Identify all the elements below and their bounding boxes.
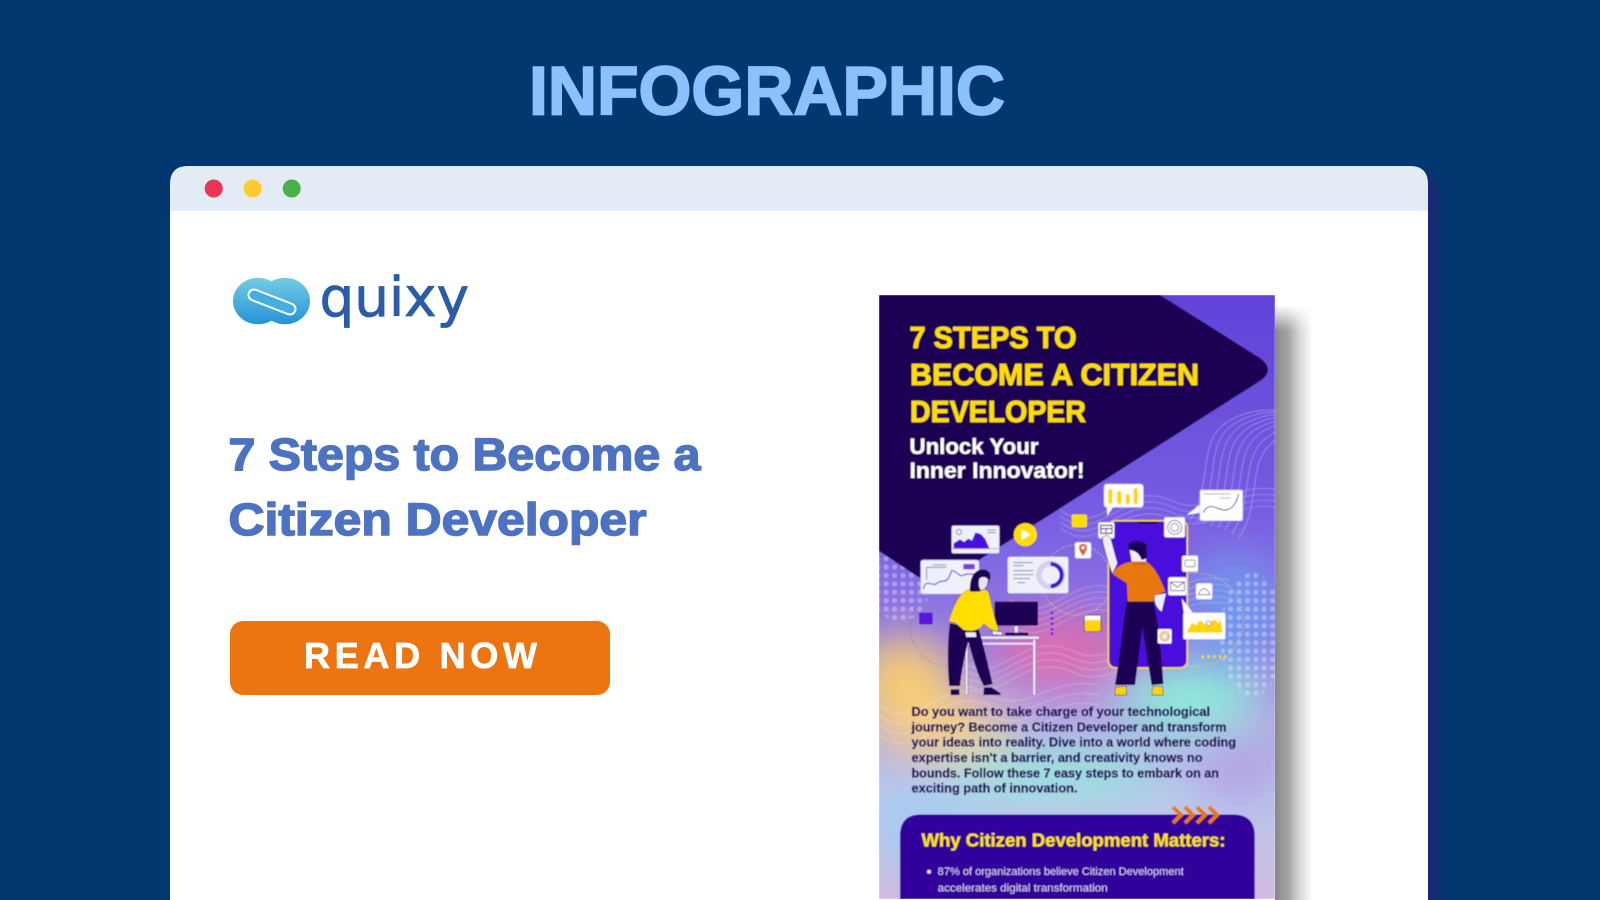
wordmark: quixy [320, 266, 469, 329]
dark arrow shape [879, 295, 1268, 588]
intro paragraph: Do you want to take charge of your technological [912, 705, 1210, 719]
panel heading: Why Citizen Development Matters: [922, 830, 1226, 850]
mail tile [1168, 577, 1187, 595]
window body [170, 211, 1428, 900]
button: read now [230, 621, 610, 695]
intro paragraph: journey? Become a Citizen Developer and transform [910, 720, 1226, 734]
intro paragraph: your ideas into reality. Dive into a world where coding [912, 736, 1236, 750]
dashed orbits [910, 522, 1243, 667]
poster subtitle: Inner Innovator! [910, 458, 1084, 483]
poster shadow [1275, 305, 1313, 900]
illustration [910, 484, 1243, 695]
grid tile [1098, 522, 1114, 538]
heading [228, 429, 701, 545]
bullet text [938, 866, 1184, 895]
man [1103, 535, 1166, 695]
heading: 7 Steps to Become a [228, 429, 701, 480]
poster subtitle: Unlock Your [910, 434, 1039, 459]
logo: quixy [233, 266, 469, 329]
line chart card [921, 560, 979, 594]
intro paragraph: bounds. Follow these 7 easy steps to embark on an [912, 766, 1219, 780]
phone [1108, 521, 1187, 668]
bullet text: accelerates digital transformation [938, 883, 1108, 895]
panel: why citizen development matters [900, 814, 1255, 899]
monitor [995, 602, 1038, 635]
cloud tile [1196, 583, 1212, 599]
play button [1014, 523, 1037, 546]
title: INFOGRAPHIC [529, 52, 1005, 130]
heading: Citizen Developer [228, 494, 647, 545]
yellow square [1072, 514, 1087, 527]
window control dots [205, 180, 301, 198]
poster title [910, 321, 1199, 429]
poster title: DEVELOPER [910, 395, 1086, 429]
wave lines [879, 409, 1275, 744]
desk [960, 636, 1039, 695]
icon: infinity link [233, 278, 310, 324]
window shadow [1428, 176, 1445, 900]
location tile [1075, 542, 1091, 558]
purple square [919, 613, 933, 624]
poster subtitle [910, 436, 1084, 480]
purple down arrows [1050, 612, 1054, 636]
intro paragraph [910, 705, 1236, 796]
doughnut card [1008, 557, 1068, 593]
bullet text: 87% of organizations believe Citizen Development [938, 866, 1184, 878]
area chart card [952, 526, 999, 553]
title bar [170, 166, 1428, 211]
yellow right arrows [1202, 655, 1227, 659]
browser window [170, 166, 1445, 900]
gear tile [1158, 629, 1172, 644]
poster title: BECOME A CITIZEN [910, 358, 1199, 392]
poster title: 7 STEPS TO [910, 321, 1076, 355]
woman [948, 569, 1003, 695]
chat tile [1182, 556, 1198, 572]
bullet [927, 870, 931, 874]
poster [879, 295, 1275, 899]
orange chevrons [1173, 807, 1217, 823]
yellow calendar tile [1084, 615, 1101, 632]
halftone dots [870, 549, 1284, 697]
line chart bubble [1187, 490, 1243, 521]
yellow area card [1182, 598, 1225, 639]
button: read now: READ NOW [304, 635, 537, 676]
intro paragraph: exciting path of innovation. [912, 782, 1078, 796]
intro paragraph: expertise isn't a barrier, and creativity knows no [912, 751, 1203, 765]
bar chart bubble [1104, 484, 1143, 516]
poster background [855, 295, 1280, 899]
ring tile [1164, 517, 1185, 537]
